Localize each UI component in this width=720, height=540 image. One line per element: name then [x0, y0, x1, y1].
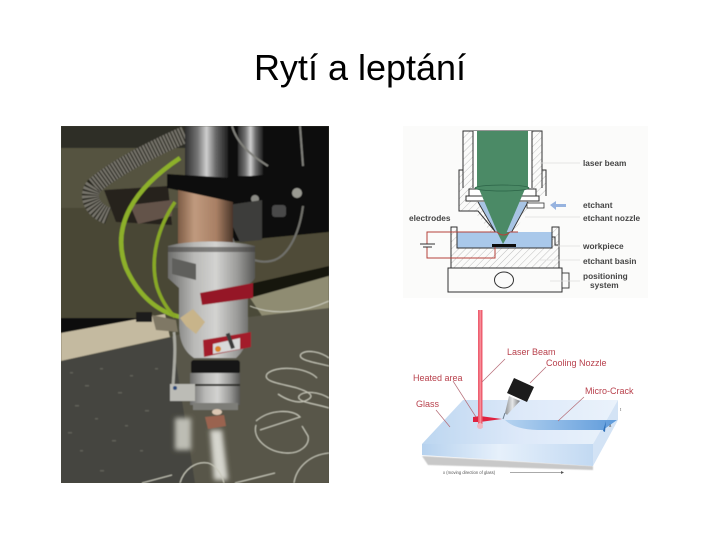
diagram labels: laser beam — [583, 158, 626, 168]
glass shadow — [422, 456, 593, 470]
corrugated hose — [90, 134, 186, 216]
diagram: laser etching apparatus — [403, 126, 648, 298]
diagram labels — [409, 158, 641, 290]
diagram labels — [413, 347, 634, 409]
diagram labels: etchant basin — [583, 256, 636, 266]
diagram labels: Laser Beam — [507, 347, 556, 357]
diagram labels: Micro-Crack — [585, 386, 634, 396]
etchant basin — [451, 227, 559, 268]
diagram labels: positioning — [583, 271, 628, 281]
diagram labels: Heated area — [413, 373, 463, 383]
glass block — [422, 400, 618, 444]
cooling nozzle — [507, 378, 534, 402]
photo background — [61, 126, 329, 361]
mounting arm and upright — [185, 126, 228, 180]
diagram: laser glass cutting — [413, 310, 634, 475]
photo: laser engraving head over metal sheet — [61, 126, 329, 483]
lower nozzle assembly — [191, 360, 240, 374]
copper tip glow — [205, 415, 226, 429]
hatched housing — [459, 131, 546, 235]
optical tube — [473, 131, 532, 188]
green tubes — [121, 158, 180, 317]
brass fittings — [180, 309, 205, 334]
axis caption: t — [620, 407, 622, 412]
etchant nozzle sides — [478, 202, 528, 235]
diagram labels: etchant — [583, 200, 613, 210]
head body — [168, 242, 255, 358]
diagram labels: workpiece — [582, 241, 624, 251]
diagram labels: Cooling Nozzle — [546, 358, 607, 368]
green laser beam — [477, 131, 528, 243]
axis caption — [443, 407, 622, 475]
heated area — [473, 416, 502, 422]
diagram labels: etchant nozzle — [583, 213, 641, 223]
positioning system — [448, 268, 562, 292]
diagram labels: Glass — [416, 399, 440, 409]
metal sheet — [170, 308, 329, 483]
light glare on sheet — [175, 418, 191, 450]
title: Rytí a leptání — [254, 47, 466, 88]
axis caption: a — [609, 423, 612, 428]
workpiece — [492, 244, 516, 247]
laser beam — [478, 310, 482, 428]
leader lines — [436, 359, 584, 427]
engraved letters — [142, 301, 329, 483]
diagram labels: electrodes — [409, 213, 451, 223]
diagram labels: system — [590, 280, 619, 290]
sheet speckle — [68, 368, 158, 472]
etchant arrow — [550, 201, 566, 210]
micro-crack — [505, 420, 617, 430]
copper sleeve — [177, 189, 234, 244]
electrodes circuit — [427, 232, 518, 258]
axis caption: x (moving direction of glass) — [443, 470, 496, 475]
